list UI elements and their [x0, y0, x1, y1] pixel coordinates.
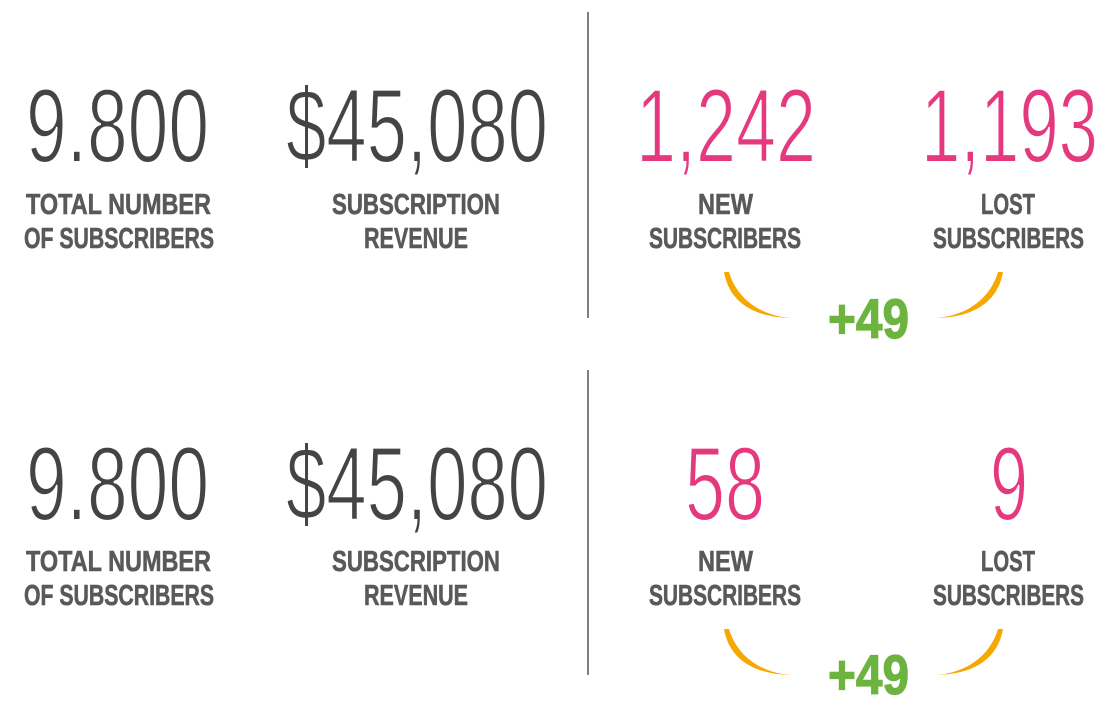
- stat: total subscribers: 9.800: [26, 426, 209, 543]
- stat: lost subscribers: LOST: [981, 546, 1035, 578]
- stat: new subscribers: NEW: [698, 189, 753, 221]
- stat: total subscribers: 9.800: [26, 68, 209, 185]
- net change value: +49: [828, 287, 909, 350]
- arrow: right arc to net change: [937, 272, 1003, 318]
- stat: new subscribers: [649, 426, 801, 612]
- stat: lost subscribers: 9: [990, 426, 1028, 543]
- stat: total subscribers: [24, 68, 214, 255]
- arrow: left arc to net change: [724, 272, 790, 318]
- stat: lost subscribers: [921, 68, 1098, 255]
- stat: subscription revenue: REVENUE: [364, 580, 468, 612]
- arrow: left arc to net change: [724, 629, 790, 675]
- stat: subscription revenue: $45,080: [286, 426, 548, 543]
- stat: new subscribers: 1,242: [636, 68, 816, 185]
- stat: total subscribers: OF SUBSCRIBERS: [24, 580, 214, 612]
- stat: new subscribers: SUBSCRIBERS: [649, 580, 801, 612]
- stat: total subscribers: [24, 426, 214, 612]
- stat: total subscribers: TOTAL NUMBER: [26, 189, 211, 221]
- stat: new subscribers: [636, 68, 816, 255]
- stat: lost subscribers: LOST: [981, 189, 1035, 221]
- stat: subscription revenue: SUBSCRIPTION: [332, 189, 500, 221]
- stat: subscription revenue: [286, 68, 548, 255]
- stat: new subscribers: NEW: [698, 546, 753, 578]
- row 2: subscriber metrics: [24, 370, 1084, 706]
- stat: subscription revenue: REVENUE: [364, 223, 468, 255]
- stat: lost subscribers: [933, 426, 1084, 612]
- stat: new subscribers: 58: [685, 426, 765, 543]
- stat: total subscribers: OF SUBSCRIBERS: [24, 223, 214, 255]
- arrow: right arc to net change: [937, 629, 1003, 675]
- stat: total subscribers: TOTAL NUMBER: [26, 546, 211, 578]
- stat: subscription revenue: $45,080: [286, 68, 548, 185]
- row 1: subscriber metrics: [24, 12, 1098, 350]
- net change value: +49: [828, 643, 909, 706]
- stat: new subscribers: SUBSCRIBERS: [649, 223, 801, 255]
- stat: subscription revenue: SUBSCRIPTION: [332, 546, 500, 578]
- stat: subscription revenue: [286, 426, 548, 612]
